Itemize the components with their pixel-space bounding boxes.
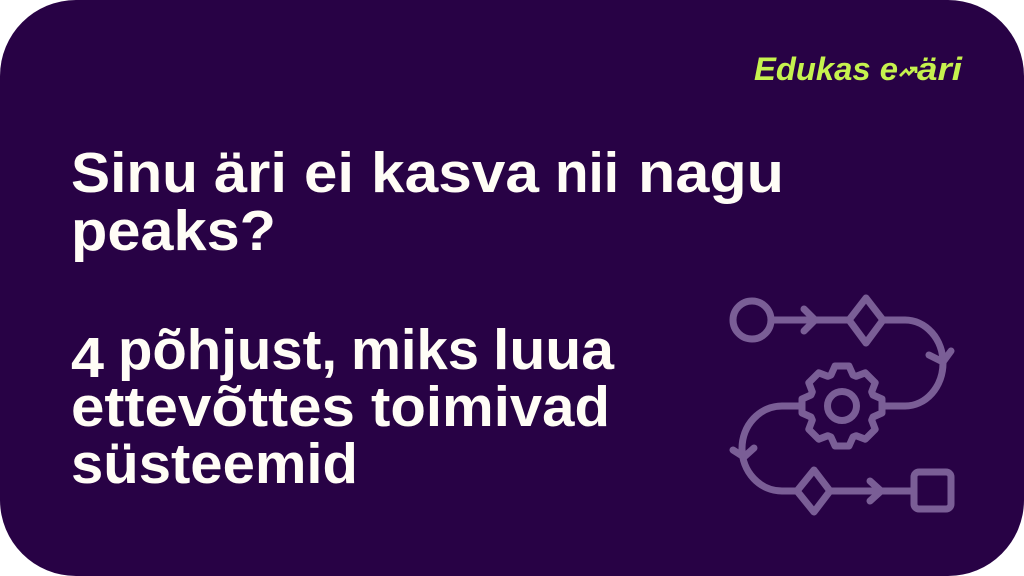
subheading: four reasons: miks (351, 318, 479, 382)
heading: question: ei (304, 141, 354, 205)
flow end square (914, 472, 951, 509)
subheading: four reasons: põhjust, (118, 318, 337, 382)
heading: question: nii (555, 141, 619, 205)
subheading: four reasons: toimivad (371, 375, 610, 439)
subheading: four reasons: süsteemid (71, 432, 358, 496)
bottom decision diamond (797, 470, 830, 512)
subheading: four reasons (71, 318, 615, 496)
heading: question: nagu (638, 141, 784, 205)
heading: question: kasva (371, 141, 540, 205)
logo: Edukas e-äri (754, 51, 963, 87)
top decision diamond (849, 298, 883, 343)
left curved connector with arrow (733, 406, 800, 491)
bottom connector with arrow (830, 481, 914, 501)
heading: question: äri (214, 141, 287, 205)
subheading: four reasons: luua (493, 318, 615, 382)
logo: Edukas e-äri: Edukas e (754, 51, 898, 87)
top connector with arrow (771, 309, 849, 331)
heading: question (71, 141, 784, 263)
flow start circle (733, 301, 771, 339)
subheading: four reasons: 4 (71, 326, 104, 390)
icon: process flow with gear (733, 298, 951, 512)
right curved connector with arrow (883, 320, 951, 406)
gear (802, 366, 882, 446)
heading: question: peaks? (71, 199, 276, 263)
logo: Edukas e-äri: äri (917, 51, 963, 87)
subheading: four reasons: ettevõttes (71, 375, 355, 439)
heading: question: Sinu (71, 141, 198, 205)
